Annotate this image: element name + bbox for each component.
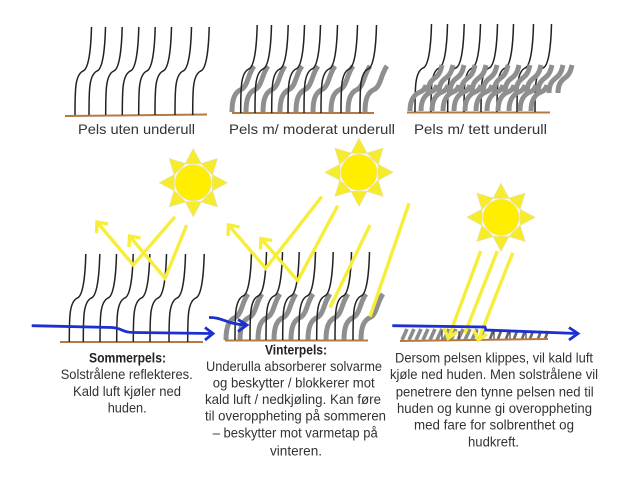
skin line [407, 112, 550, 114]
text block: winter coat: vinteren. [270, 442, 322, 458]
icon: sun [325, 138, 393, 206]
icon: sun [467, 183, 535, 251]
heading: Vinterpels: Vinterpels: [265, 342, 327, 358]
text block: winter coat: og beskytter / blokkerer mot [213, 375, 375, 391]
text block: clipped coat: kjøle ned huden. Men solstrålene vil [390, 366, 598, 382]
text block: winter coat: Underulla absorberer solvarme [206, 358, 382, 374]
arrow: reflected sunbeam 2 [129, 225, 187, 278]
text block: summer coat: Kald luft kjøler ned [73, 383, 181, 399]
dense undercoat [410, 65, 572, 111]
skin line [225, 340, 368, 342]
panel: summer coat diagram [32, 149, 227, 342]
arrow: reflected sunbeam 1 [96, 217, 175, 265]
arrow: cold air flow [32, 326, 213, 340]
text block: winter coat: til overoppheting på sommeren [205, 408, 386, 424]
short clipped fur [402, 329, 548, 340]
text block: clipped coat: hudkreft. [468, 434, 519, 450]
text block: clipped coat: penetrere den tynne pelsen ned til [396, 384, 594, 400]
arrow: penetrating sunbeam 1 [444, 251, 481, 338]
panel: fur with moderate undercoat [229, 25, 395, 137]
guard hairs [69, 254, 204, 342]
text block: clipped coat [390, 350, 598, 450]
text block: clipped coat: huden og kunne gi overoppheting [397, 400, 592, 416]
text block: winter coat: – beskytter mot varmetap på [213, 424, 378, 440]
text block: clipped coat: med fare for solbrenthet og [414, 416, 574, 432]
text block: summer coat: Solstrålene reflekteres. [61, 366, 193, 382]
undercoat [226, 294, 383, 340]
panel: winter coat diagram [209, 138, 409, 340]
skin line [232, 112, 374, 114]
arrow: reflected sunbeam 1 [228, 197, 322, 268]
icon: sun [159, 149, 227, 217]
panel: clipped coat diagram [392, 183, 578, 341]
arrow: cold air flow [392, 326, 578, 340]
text block: clipped coat: Dersom pelsen klippes, vil kald luft [395, 350, 593, 366]
text block: winter coat [205, 342, 386, 458]
arrow: absorbed sunbeam 2 [370, 203, 409, 317]
text block: summer coat [61, 350, 193, 416]
undercoat [232, 66, 387, 112]
arrow: penetrating sunbeam 3 [474, 253, 513, 340]
skin line [65, 114, 207, 116]
guard hairs [75, 27, 209, 115]
caption: Pels m/ moderat underull: Pels m/ moderat underull [229, 121, 395, 137]
arrow: reflected sunbeam 2 [260, 206, 338, 281]
guard hairs [241, 25, 376, 113]
skin line [400, 339, 548, 341]
arrow: penetrating sunbeam 2 [465, 251, 497, 333]
text block: summer coat: huden. [108, 400, 147, 416]
heading: Sommerpels: Sommerpels: [89, 350, 166, 366]
caption: Pels m/ tett underull: Pels m/ tett underull [414, 121, 547, 137]
arrow: blocked cold air [209, 317, 247, 332]
arrow: absorbed sunbeam 1 [330, 225, 370, 308]
text block: winter coat: kald luft / nedkjøling. Kan føre [205, 391, 381, 407]
caption: Pels uten underull: Pels uten underull [78, 121, 195, 137]
panel: fur without undercoat [65, 27, 209, 137]
skin line [60, 341, 203, 343]
guard hairs [415, 24, 552, 112]
guard hairs [235, 252, 370, 340]
panel: fur with dense undercoat [407, 24, 572, 137]
